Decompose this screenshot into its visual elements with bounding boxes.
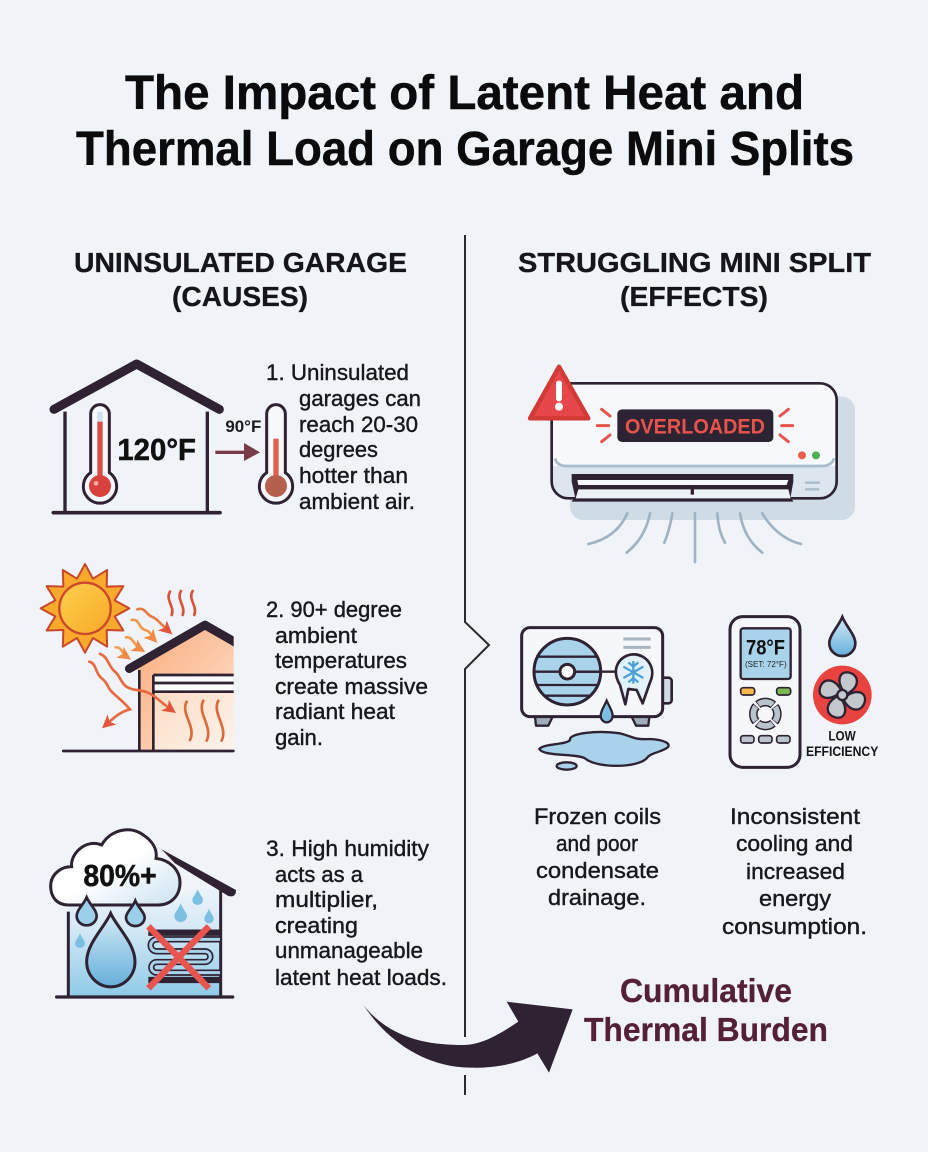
- alert rays: [597, 409, 793, 442]
- text: cause 3: [266, 836, 447, 990]
- title: [76, 67, 854, 176]
- text: effect frozen coils: condensate: [536, 858, 659, 883]
- text: cause 2: [266, 597, 428, 750]
- display: overloaded: [617, 409, 773, 442]
- heading: effects: [518, 247, 871, 312]
- text: cause 1: hotter than: [299, 463, 408, 488]
- sun: [41, 564, 129, 653]
- text: cause 2: temperatures: [275, 648, 407, 673]
- icon: drop above fan: [829, 617, 855, 656]
- outdoor unit: [522, 628, 672, 726]
- text: cause 2: ambient: [275, 623, 357, 648]
- unit shadow: [570, 397, 855, 520]
- text: cause 2: 2. 90+ degree: [266, 597, 402, 622]
- label: 90°F: 90°F: [225, 417, 261, 436]
- coils crossed out: [148, 929, 220, 986]
- drip: [601, 701, 613, 722]
- heading: effects: STRUGGLING MINI SPLIT: [518, 247, 871, 278]
- text: cause 1: garages can: [299, 386, 421, 411]
- text: cause 3: creating: [275, 913, 358, 938]
- arrow: causes to burden: [363, 1002, 573, 1073]
- text: effect inconsistent cooling: [722, 804, 867, 939]
- center divider with chevron: [465, 235, 489, 1095]
- heading: effects: (EFFECTS): [620, 281, 768, 312]
- text: cause 3: 3. High humidity: [266, 836, 429, 861]
- text: cause 2: create massive: [275, 674, 428, 699]
- text: effect frozen coils: [534, 804, 661, 910]
- vent and louver: [572, 474, 793, 502]
- ice with snowflake: [616, 654, 652, 704]
- icon: hot garage with thermometers: [53, 364, 293, 513]
- text: cause 2: radiant heat: [275, 699, 395, 724]
- text: effect frozen coils: and poor: [556, 831, 638, 856]
- icon: low efficiency fan: [813, 666, 872, 724]
- reading: set 72°F: (SET: 72°F): [745, 660, 787, 669]
- icon: indoor thermometer: [83, 405, 117, 503]
- label: low efficiency: [806, 728, 879, 759]
- humid garage: [57, 849, 236, 997]
- title: Thermal Load on Garage Mini Splits: [76, 123, 854, 176]
- text: effect inconsistent cooling: consumption.: [722, 914, 867, 939]
- text: cause 3: latent heat loads.: [275, 965, 447, 990]
- icon: frozen outdoor unit with puddle: [522, 617, 879, 770]
- text: effect inconsistent cooling: cooling and: [736, 831, 853, 856]
- icon: sun radiating on garage: [41, 564, 240, 751]
- title: The Impact of Latent Heat and: [125, 67, 804, 120]
- text: effect frozen coils: drainage.: [548, 885, 646, 910]
- text: cause 1: degrees: [299, 437, 378, 462]
- text: cause 1: [266, 360, 421, 514]
- airflow lines: [588, 513, 801, 562]
- unit body: [552, 383, 837, 498]
- text: effect inconsistent cooling: energy: [759, 886, 831, 911]
- icon: humid garage with cloud: [51, 830, 236, 997]
- text: cause 3: multiplier,: [275, 887, 378, 912]
- text: cause 1: 1. Uninsulated: [266, 360, 409, 385]
- text: effect frozen coils: Frozen coils: [534, 804, 661, 829]
- radiant heat arrows: [89, 591, 223, 741]
- puddle: [539, 732, 669, 770]
- reading: 78°F: 78°F: [746, 635, 785, 659]
- heading: causes: [74, 247, 407, 312]
- conclusion: cumulative thermal burden: [584, 972, 828, 1048]
- label: low efficiency: LOW: [828, 728, 856, 744]
- text: cause 1: ambient air.: [299, 489, 415, 514]
- icon: outdoor thermometer: [259, 405, 293, 503]
- label: 120°F: 120°F: [117, 433, 196, 467]
- arrow: outdoor to indoor: [215, 443, 260, 461]
- conclusion: cumulative thermal burden: Thermal Burden: [584, 1011, 828, 1048]
- heading: causes: UNINSULATED GARAGE: [74, 247, 407, 278]
- display: overloaded: OVERLOADED: [625, 414, 765, 438]
- text: effect inconsistent cooling: increased: [746, 859, 845, 884]
- text: cause 3: acts as a: [275, 862, 364, 887]
- text: cause 2: gain.: [275, 725, 323, 750]
- text: cause 1: reach 20-30: [299, 412, 418, 437]
- warning triangle: [530, 367, 588, 418]
- label: low efficiency: EFFICIENCY: [806, 743, 879, 759]
- conclusion: cumulative thermal burden: Cumulative: [620, 972, 792, 1009]
- icon: remote control: [730, 617, 800, 767]
- heading: causes: (CAUSES): [172, 281, 308, 312]
- label: 80%+: 80%+: [83, 859, 157, 893]
- cloud: [51, 830, 180, 905]
- icon: overloaded indoor unit: [530, 367, 855, 562]
- text: cause 3: unmanageable: [275, 938, 423, 963]
- garage: [129, 625, 240, 751]
- text: effect inconsistent cooling: Inconsistent: [730, 804, 860, 829]
- water drops: [75, 889, 214, 987]
